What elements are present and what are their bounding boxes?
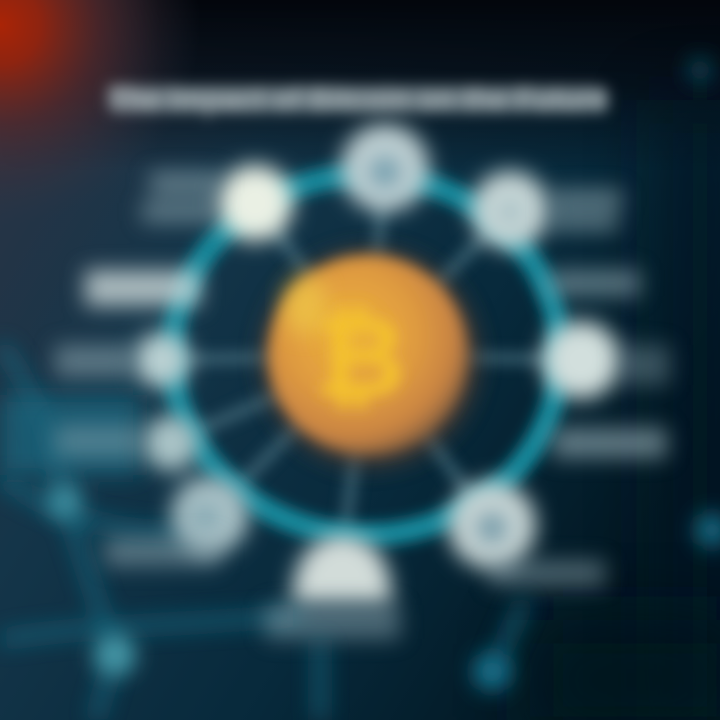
label lower left (55, 425, 140, 457)
ring and spokes (162, 170, 580, 570)
label mid right (548, 270, 640, 296)
label upper left (142, 172, 220, 222)
node bottom (292, 535, 392, 603)
node bottom left (171, 476, 249, 554)
label mid left (85, 270, 200, 306)
label lower right (552, 428, 667, 458)
label bottom right (490, 560, 605, 586)
central coin (260, 248, 480, 468)
node upper left (217, 165, 293, 241)
title: The Impact of Bitcoin on the Future (108, 80, 608, 119)
label right (620, 345, 670, 385)
node right (542, 321, 620, 399)
central coin: ₿ (315, 296, 405, 419)
labels (55, 172, 670, 639)
node lower left (143, 415, 199, 471)
label upper right (550, 190, 622, 230)
label bottom left (105, 538, 220, 566)
node upper right (471, 171, 549, 249)
label bottom (265, 605, 400, 639)
nodes (134, 124, 620, 603)
network lines lower left (0, 345, 525, 720)
node left (134, 332, 190, 388)
node top (341, 124, 429, 212)
label left (55, 345, 133, 377)
node bottom right (448, 481, 536, 569)
